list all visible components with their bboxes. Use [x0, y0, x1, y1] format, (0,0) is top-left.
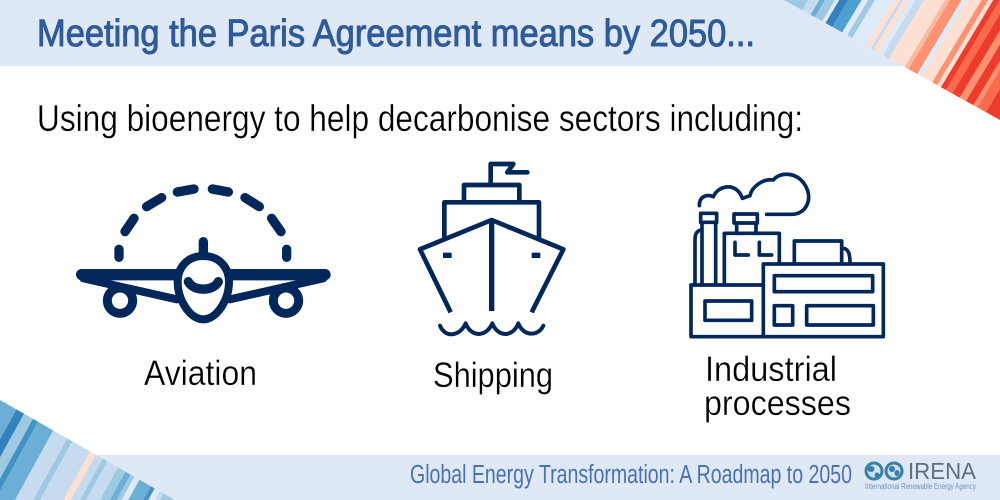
climate stripes top right [784, 0, 1000, 120]
label: aviation: Aviation [144, 354, 257, 393]
icon: factory [691, 174, 883, 337]
icon: ship [420, 164, 563, 334]
white corner below climate stripes [905, 66, 1000, 120]
label: industrial processes: Industrial [705, 350, 837, 389]
icon: aeroplane [82, 189, 325, 319]
logo: IRENA [865, 458, 977, 491]
header band [0, 0, 1000, 66]
label: industrial processes: processes [704, 384, 851, 423]
label: shipping: Shipping [433, 356, 553, 395]
logo: IRENA: IRENA [908, 458, 977, 484]
title: Meeting the Paris Agreement means by 2050... [37, 13, 755, 55]
subheading: Using bioenergy to help decarbonise sectors including: [37, 97, 803, 139]
label: industrial processes [704, 350, 851, 423]
footer text: Global Energy Transformation: A Roadmap to 2050 [410, 461, 852, 489]
footer band [0, 455, 1000, 500]
climate stripes bottom left [0, 400, 174, 500]
